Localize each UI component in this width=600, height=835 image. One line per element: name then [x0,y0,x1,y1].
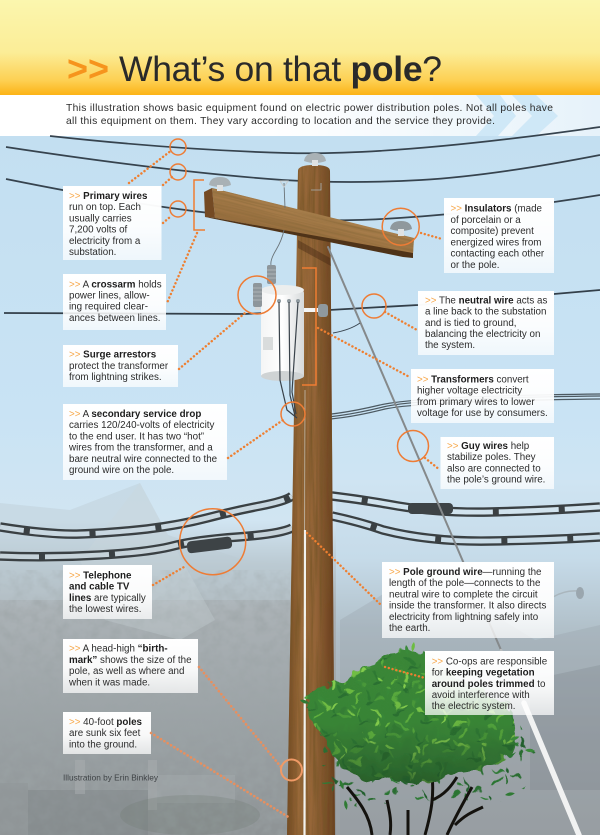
callout: telephone and cable lines: lines [69,593,92,604]
callout: pole ground wire: electricity from lightning safely into [389,612,539,623]
callout: crossarm: power lines, allow- [69,290,150,302]
drop wire to arrester [271,183,285,265]
callout: vegetation: the electric system. [432,701,516,712]
callout: vegetation: avoid interference with [432,690,530,701]
callout: vegetation: Co-ops are responsible [446,656,548,667]
brackets [194,180,316,385]
insulators [209,153,412,236]
callout: guy wires: the pole’s ground wire. [447,475,545,486]
callout: transformers: >> [417,374,431,385]
callout: secondary service drop: >> [69,409,83,420]
callout: telephone and cable lines: Telephone [83,570,132,581]
highlight circles [170,139,428,780]
callout: neutral wire [418,291,554,355]
callout: pole ground wire: Pole ground wire—running the [403,567,541,578]
intro text: all this equipment on them. They vary according to location and the service they provide. [66,116,495,127]
callout: surge arrestors: from lightning strikes. [69,372,162,383]
callout: insulators: or the pole. [450,260,500,271]
title: What’s on that pole? [119,49,442,89]
callout: birthmark: when it was made. [68,677,150,688]
header band [0,0,600,95]
utility pole [287,165,335,835]
guy wire [328,247,579,835]
callout: pole ground wire: length of the pole—connects to the [389,578,541,589]
callout: secondary service drop [63,404,227,480]
callout: transformers: voltage for use by consumers. [417,408,548,419]
callout: pole ground wire: the earth. [389,623,430,634]
callout: neutral wire: balancing the electricity on [425,329,540,340]
callout: insulators: composite) prevent [450,226,534,237]
callout: crossarm: >> [69,279,83,290]
callout: birthmark: pole, as well as where and [69,666,184,677]
wire hook [280,181,288,187]
secondary service drop wires [295,394,600,420]
callout: neutral wire: The neutral wire acts as [439,295,547,306]
neutral attachment bracket [303,304,328,317]
callout: 40-foot poles: are sunk six feet [69,728,141,739]
crossarm [204,188,414,258]
callout: secondary service drop: carries 120/240-volts of electricity [69,420,214,431]
callout: guy wires [440,437,554,489]
callout: insulators: contacting each other [450,249,545,260]
callout: primary wires: substation. [69,247,116,258]
intro text [66,103,553,127]
callout: insulators: Insulators (made [465,204,542,215]
chevron watermark [476,95,558,136]
callout: vegetation: for [432,668,446,678]
transformer [261,285,304,381]
callout: insulators [444,198,554,273]
callout: primary wires: electricity from a [69,236,141,247]
cable splice sleeves [186,503,453,554]
callout: secondary service drop: ground wire on the pole. [69,465,174,476]
callout: transformers: from primary wires to lower [417,397,535,408]
callout: telephone and cable lines [63,565,152,619]
callout: primary wires [63,186,162,260]
callout: secondary service drop: bare neutral wire connected to the [69,454,218,465]
callout: neutral wire: >> [425,295,439,306]
callout: secondary service drop: A secondary service drop [83,409,201,420]
callout: telephone and cable lines: are typically [91,593,146,604]
callout: crossarm: ing required clear- [69,302,148,313]
ground tie [333,323,360,333]
callout: guy wires: also are connected to [447,464,541,474]
credit: Illustration by Erin Binkley [63,772,159,782]
callout: 40-foot poles: into the ground. [69,739,137,750]
callout: birthmark: >> [69,644,83,655]
callout: insulators: of porcelain or a [450,215,521,226]
callout: insulators: energized wires from [450,237,541,248]
callout: neutral wire: the system. [425,340,475,351]
callout: guy wires: Guy wires help [461,441,529,452]
callout: crossarm: ances between lines. [69,313,160,324]
telephone and cable TV lines [0,496,600,557]
callout: primary wires: usually carries [69,213,132,224]
callout: surge arrestors [63,345,178,387]
callout: primary wires: >> [69,191,83,202]
callout: 40-foot poles [63,712,151,754]
callout: surge arrestors: >> [69,350,83,361]
callout: primary wires: run on top. Each [69,202,141,213]
callout: 40-foot poles: 40-foot poles [83,717,142,728]
callout: neutral wire: and is tied to ground, [425,318,517,329]
transformer leads [279,302,298,418]
title: >> [67,48,109,89]
callout: telephone and cable lines: and cable TV [69,582,130,592]
callout: transformers: higher voltage electricity [417,386,522,396]
callout: crossarm: A crossarm holds [83,279,162,290]
callout: pole ground wire: neutral wire to complete the circuit [389,590,538,600]
intro text: This illustration shows basic equipment found on electric power distribution poles. Not all poles have [66,103,553,114]
callout: pole ground wire [382,562,554,638]
callout: neutral wire: a line back to the substation [425,306,546,318]
callout: 40-foot poles: >> [69,717,83,728]
leader lines [129,150,442,818]
primary wires [6,127,600,220]
callout: secondary service drop: wires from the transformer, and a [68,443,213,454]
neutral wire [4,290,600,314]
callout: birthmark: mark” [69,655,97,666]
callout: pole ground wire: inside the transformer. It also directs [389,601,546,612]
callout: telephone and cable lines: >> [69,570,83,581]
callout: birthmark: A head-high “birth- [83,644,168,655]
callout: vegetation [425,651,554,715]
background houses in fog [0,483,600,835]
callout: guy wires: stabilize poles. They [447,452,536,463]
callout: telephone and cable lines: the lowest wires. [69,604,141,615]
callout: pole ground wire: >> [389,567,403,578]
callout: vegetation: around poles trimmed [432,679,535,690]
callout: transformers: Transformers convert [431,374,529,385]
callout: surge arrestors: Surge arrestors [83,350,157,361]
callout: crossarm [63,274,166,330]
callout: birthmark: shows the size of the [97,655,192,666]
intro band [0,95,600,136]
callout: surge arrestors: protect the transformer [69,361,169,372]
callout: insulators: >> [450,204,465,215]
callout: transformers [411,369,554,423]
callout: vegetation: keeping vegetation [446,668,535,678]
surge arrestors [253,265,276,310]
callout: primary wires: Primary wires [83,191,148,202]
callout: secondary service drop: to the end user. It has two “hot” [69,432,204,442]
tree [299,642,536,835]
callout: birthmark [63,639,198,693]
callout: vegetation: >> [432,656,446,667]
callout: vegetation: to [535,679,546,690]
callout: primary wires: 7,200 volts of [69,225,128,236]
callout: guy wires: >> [447,441,461,452]
